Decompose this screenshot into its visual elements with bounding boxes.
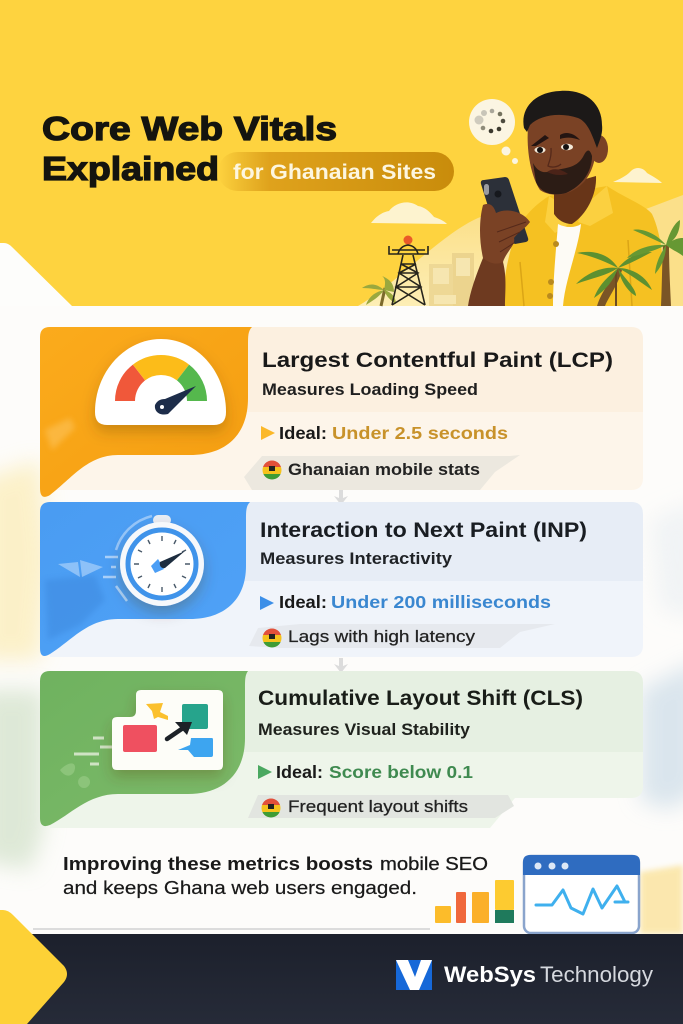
thought bubble with loading spinner [469,99,518,164]
card: cumulative layout shift [40,671,643,828]
illustration: building [429,253,474,306]
closing message: Improving these metrics boosts [63,853,373,874]
icon: ghana flag [262,628,282,648]
text panel [50,502,643,657]
phone [481,177,528,244]
text panel [50,671,643,828]
hair [523,91,602,148]
undershirt [553,224,581,306]
tab texture [45,418,75,450]
arm and hand [468,258,506,306]
icon: ghana flag [262,460,282,480]
brand name [444,962,654,987]
subtitle pill [218,152,454,191]
illustration: man checking phone [468,91,665,306]
header band [0,0,683,306]
ideal arrow [260,596,274,610]
brand name: WebSys [444,962,536,987]
icon: speed gauge [95,339,226,425]
footer bar [0,934,683,1024]
footer yellow diamond [0,910,67,1024]
colored tab [40,671,248,826]
brand name: Technology [540,962,654,987]
title: Core Web Vitals [42,110,337,147]
neck [554,176,596,224]
nose and mouth [548,148,561,167]
closing message [63,853,488,898]
ideal arrow [261,426,275,440]
icon: ghana flag [262,798,280,818]
closing message: and keeps Ghana web users engaged. [63,877,417,898]
stat strip [244,455,520,490]
stat text: Lags with high latency [288,627,476,646]
fingers [480,204,530,264]
eyes [534,147,546,153]
divider [33,928,430,930]
ideal value: Score below 0.1 [329,762,473,782]
brows [531,133,580,146]
websys logo [396,960,432,990]
stat strip [249,624,555,648]
colored tab [40,502,250,656]
shirt buttons [553,241,559,247]
icon: shifting layout [112,690,223,770]
card: largest contentful paint [40,327,643,497]
metric subtitle: Measures Loading Speed [262,381,478,399]
icon: stopwatch [58,515,204,606]
metric subtitle: Measures Visual Stability [258,721,471,739]
stat strip [248,795,514,818]
metric subtitle: Measures Interactivity [260,550,453,568]
browser window icon [523,855,640,933]
metric title: Largest Contentful Paint (LCP) [262,348,613,372]
colored tab [40,327,252,497]
ideal label: Ideal: [279,592,327,612]
watercolor background washes [0,460,683,934]
subtitle pill: for Ghanaian Sites [233,161,436,184]
arrow: lcp to inp [334,490,348,505]
stat text: Ghanaian mobile stats [288,460,480,479]
metric title: Cumulative Layout Shift (CLS) [258,687,583,710]
title: Explained [42,150,219,187]
ideal label: Ideal: [279,423,327,443]
illustration: telecom tower [389,236,428,305]
shirt [504,186,665,306]
illustration: hills and clouds [358,168,683,306]
white corner wedge [0,243,72,306]
closing message: mobile SEO [380,853,488,874]
ideal label: Ideal: [276,762,323,782]
card: interaction to next paint [40,502,643,657]
ear [590,135,608,163]
illustration: palm trees [576,220,683,306]
title [42,110,337,187]
illustration: small palm [362,276,396,306]
metric title: Interaction to Next Paint (INP) [260,519,587,542]
ideal value: Under 2.5 seconds [332,423,508,443]
beard [533,151,592,194]
bar chart icon [435,880,514,923]
tab texture [45,575,105,640]
tab texture [60,763,90,788]
text panel [50,327,643,490]
ideal value: Under 200 milliseconds [331,592,551,612]
stat text: Frequent layout shifts [288,797,468,816]
speed marks [74,738,112,764]
face [528,111,596,195]
ideal arrow [258,765,272,779]
arrow: inp to cls [334,658,348,673]
